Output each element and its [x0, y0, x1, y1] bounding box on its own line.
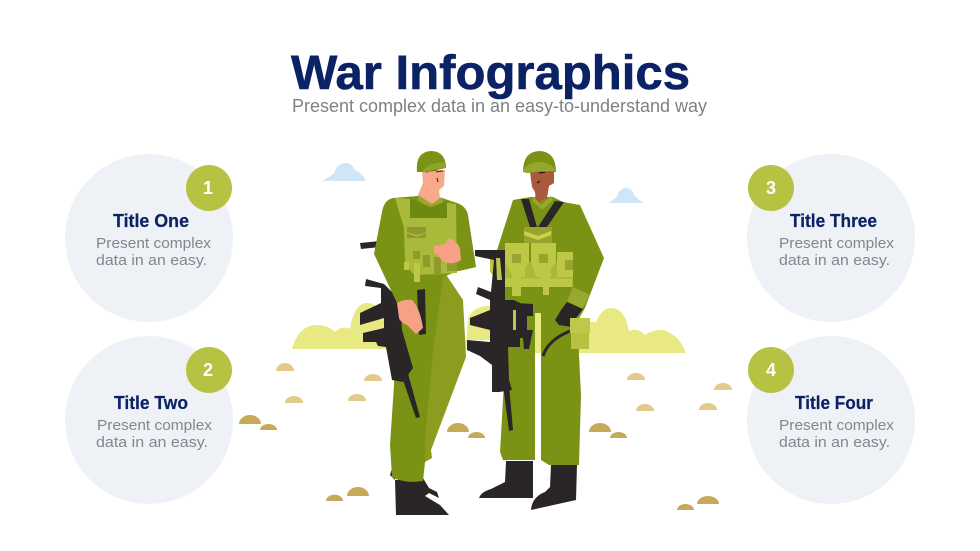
panel: title one: Title One	[113, 211, 189, 231]
helmet brim	[423, 162, 446, 172]
left yellow hills	[292, 303, 490, 349]
panel: title four: 4	[766, 360, 776, 380]
panel: title four: data in an easy.	[779, 434, 890, 451]
panel: title four	[747, 336, 915, 504]
helmet	[417, 151, 446, 172]
neck and head	[418, 170, 445, 206]
rifle magazine	[417, 289, 426, 335]
helmet brim	[523, 162, 556, 173]
soldier: right	[467, 151, 604, 510]
lower hand	[397, 300, 423, 334]
icon: left cloud	[322, 163, 366, 181]
icon: right cloud	[608, 188, 644, 203]
panel: title two: 2	[203, 360, 213, 380]
cuff	[459, 243, 476, 271]
panel: title two: Present complex	[97, 417, 213, 434]
cable	[543, 331, 570, 356]
rifle	[360, 241, 420, 418]
panel: title four: Title Four	[795, 393, 873, 413]
panel: title one	[65, 154, 233, 322]
boots	[390, 462, 449, 515]
subtitle: Present complex data in an easy-to-understand way	[292, 96, 707, 116]
ground mounds	[239, 363, 732, 510]
panel: title one: Present complex	[96, 235, 212, 252]
panel: title three: Present complex	[779, 235, 895, 252]
panel: title two	[65, 336, 233, 504]
panel: title three: Title Three	[790, 211, 877, 231]
helmet	[523, 151, 556, 173]
panel: title four: Present complex	[779, 417, 895, 434]
panel: title two: data in an easy.	[96, 434, 208, 451]
tactical vest	[490, 227, 573, 296]
glove	[555, 302, 583, 327]
left arm	[374, 198, 412, 303]
collar	[418, 195, 443, 211]
collar	[533, 196, 553, 210]
hand on chest	[434, 238, 461, 263]
chest straps	[521, 199, 564, 227]
panel: title one: data in an easy.	[96, 252, 207, 269]
rifle highlight	[496, 258, 516, 330]
side pouch	[570, 318, 590, 333]
boots	[479, 461, 533, 498]
body	[390, 196, 476, 482]
panel: title three: data in an easy.	[779, 252, 890, 269]
right yellow hills	[533, 308, 686, 353]
face marks	[537, 171, 551, 183]
tactical vest	[395, 198, 457, 282]
panel: title one: 1	[203, 178, 213, 198]
panel: title three	[747, 154, 915, 322]
lighter trouser leg	[424, 270, 466, 462]
neck and head	[530, 172, 554, 203]
soldier: left	[360, 151, 476, 515]
body	[497, 197, 604, 465]
panel: title two: Title Two	[114, 393, 188, 413]
panel: title three: 3	[766, 178, 776, 198]
cuff	[567, 287, 590, 309]
title: War Infographics	[291, 47, 690, 100]
face marks	[423, 170, 443, 182]
rifle	[467, 250, 533, 431]
